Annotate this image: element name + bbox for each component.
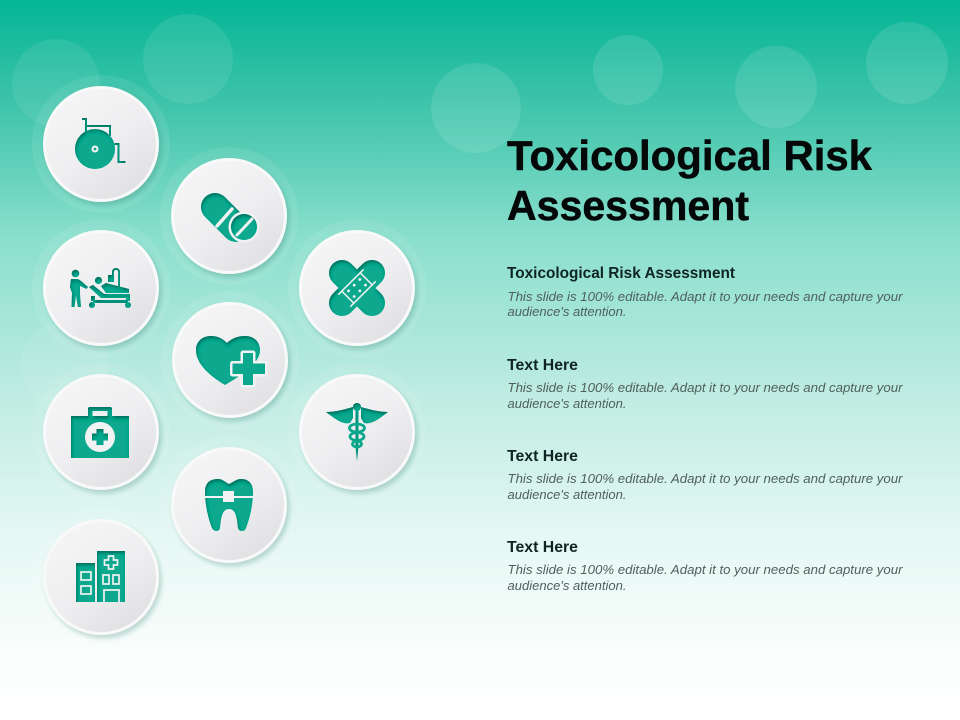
text block: text here 3: audience's attention. bbox=[508, 579, 626, 593]
text block: text here 3 bbox=[507, 539, 903, 593]
title bbox=[507, 132, 873, 229]
title: Assessment bbox=[507, 182, 749, 229]
text block: text here 2: audience's attention. bbox=[508, 488, 626, 502]
text block: text here 2: Text Here bbox=[507, 448, 578, 465]
text block: text here 2: This slide is 100% editable. Adapt it to your needs and capture your bbox=[508, 472, 903, 486]
text block: text here 3: Text Here bbox=[507, 539, 578, 556]
icon button: wheelchair bbox=[44, 88, 158, 200]
icon button: caduceus bbox=[300, 376, 414, 488]
text block: text here 1: Text Here bbox=[507, 357, 578, 374]
text block: text here 2 bbox=[507, 448, 903, 502]
text block: toxicological risk assessment bbox=[507, 265, 903, 319]
icon button: patient on hospital bed bbox=[44, 232, 158, 344]
text block: text here 1: audience's attention. bbox=[508, 397, 626, 411]
text block: toxicological risk assessment: This slide is 100% editable. Adapt it to your needs and capture your bbox=[508, 290, 903, 304]
icon button: pill capsule and tablet bbox=[172, 160, 286, 272]
icon button: first aid kit bbox=[44, 376, 158, 488]
icon button: hospital building bbox=[44, 520, 158, 634]
icon button: heart with plus bbox=[174, 304, 286, 416]
button halos bbox=[32, 75, 426, 646]
text block: text here 1 bbox=[507, 357, 903, 411]
icon button: tooth with braces bbox=[172, 448, 286, 562]
text block: toxicological risk assessment: Toxicological Risk Assessment bbox=[507, 265, 735, 282]
text block: text here 3: This slide is 100% editable. Adapt it to your needs and capture your bbox=[508, 563, 903, 577]
text block: text here 1: This slide is 100% editable. Adapt it to your needs and capture your bbox=[508, 381, 903, 395]
title: Toxicological Risk bbox=[507, 132, 873, 179]
icon button: bandage bbox=[300, 232, 414, 344]
decorative bokeh circles bbox=[12, 14, 948, 409]
text block: toxicological risk assessment: audience's attention. bbox=[508, 305, 626, 319]
